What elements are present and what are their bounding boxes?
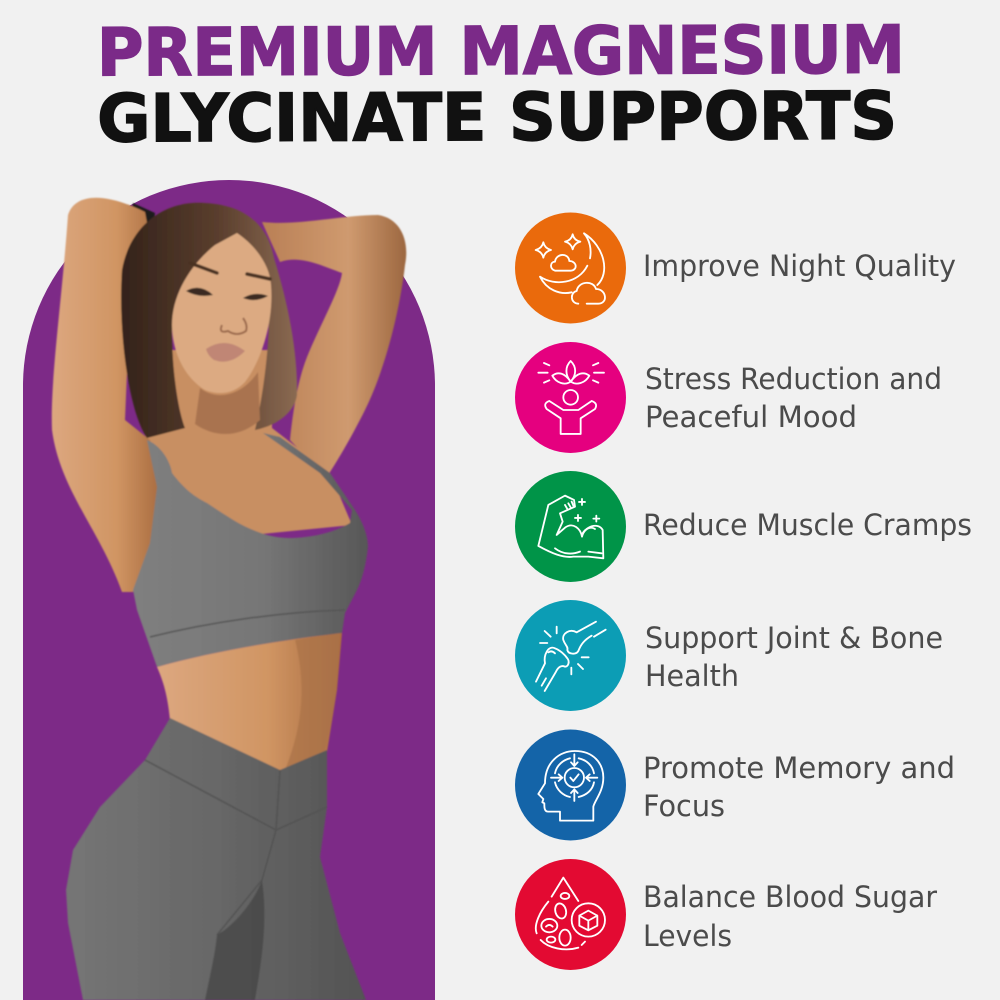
benefit: stress reduction <box>515 342 942 453</box>
benefits list <box>515 212 972 970</box>
inner leg shadow <box>205 880 264 1000</box>
label: Promote Memory and <box>643 751 955 785</box>
icon: lotus and person <box>515 342 626 453</box>
label: Health <box>645 659 739 693</box>
face <box>172 233 271 393</box>
leggings <box>66 718 366 1000</box>
label: Reduce Muscle Cramps <box>643 508 972 542</box>
title: PREMIUM MAGNESIUM <box>97 12 905 91</box>
left arm <box>52 198 160 592</box>
benefit: muscle cramps <box>515 471 972 582</box>
eyebrows <box>190 263 270 279</box>
title <box>97 12 905 157</box>
waistband seam <box>145 760 327 935</box>
eyes <box>186 288 268 300</box>
purple arch backdrop <box>23 180 435 1000</box>
label: Levels <box>643 919 732 953</box>
benefit: blood sugar <box>515 859 937 970</box>
icon: blood drop and sugar cube <box>515 859 626 970</box>
benefit: memory and focus <box>515 730 955 840</box>
hair <box>121 203 297 438</box>
icon: flexed arm <box>515 471 626 582</box>
label <box>645 621 943 693</box>
nose <box>221 318 247 334</box>
label <box>643 880 937 953</box>
midriff <box>157 633 342 772</box>
label: Support Joint & Bone <box>645 621 943 655</box>
label: Improve Night Quality <box>643 249 956 283</box>
label <box>645 362 942 434</box>
label: Peaceful Mood <box>645 400 857 434</box>
neck shadow <box>195 372 260 434</box>
label: Stress Reduction and <box>645 362 942 396</box>
top band line <box>150 610 345 637</box>
icon: bone joint <box>515 600 626 711</box>
icon: moon and clouds <box>515 212 626 324</box>
label <box>643 751 955 823</box>
top <box>133 433 368 667</box>
right arm <box>262 215 406 478</box>
lips <box>206 343 245 362</box>
label: Balance Blood Sugar <box>643 880 937 914</box>
photo: woman in grey activewear <box>52 198 406 1000</box>
hair tie <box>125 203 155 262</box>
icon: head with target <box>515 730 626 840</box>
benefit: joint and bone <box>515 600 943 711</box>
title: GLYCINATE SUPPORTS <box>97 78 897 157</box>
chest and neck <box>147 350 352 545</box>
benefit: night quality <box>515 212 956 324</box>
label: Focus <box>643 789 725 823</box>
abdomen shading <box>285 633 340 770</box>
